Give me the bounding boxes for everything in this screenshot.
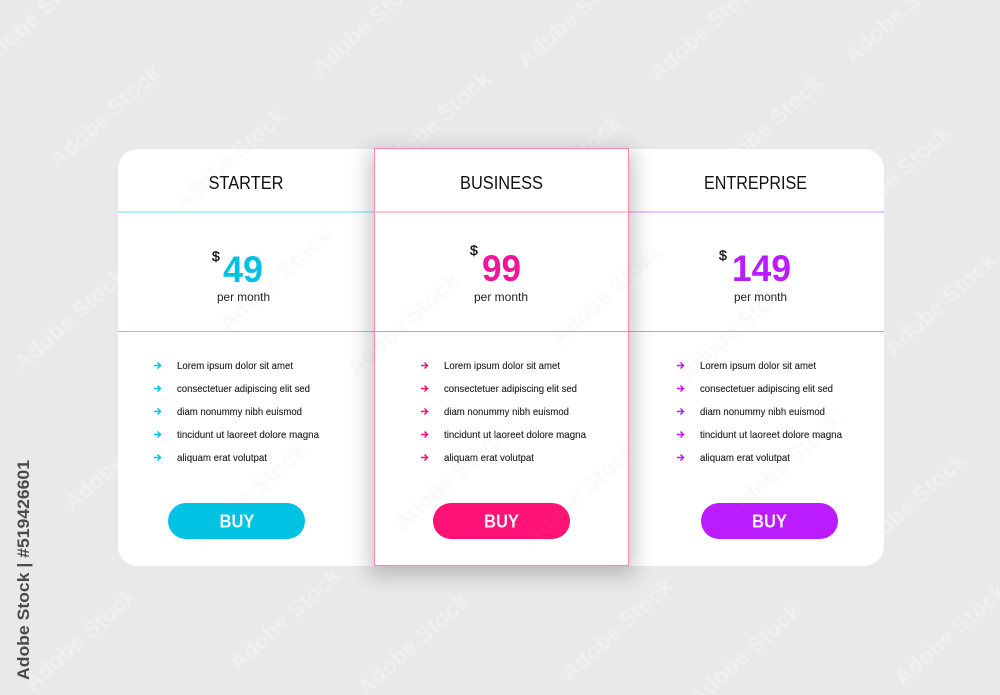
watermark pattern: Adobe Stock — [374, 65, 496, 179]
panel: business plan — [374, 148, 628, 566]
price: 49: 49 — [223, 249, 263, 290]
feature list: entreprise: diam nonummy nibh euismod — [700, 406, 825, 418]
faint watermark over card: Adobe Stock — [674, 272, 796, 386]
feature list: entreprise: tincidunt ut laoreet dolore magna — [700, 429, 842, 441]
faint watermark over card — [169, 102, 846, 551]
faint watermark over card: Adobe Stock — [189, 437, 311, 551]
watermark pattern: Adobe Stock — [19, 582, 141, 695]
feature list: starter: tincidunt ut laoreet dolore magna — [177, 429, 319, 441]
price: 149: $ — [719, 247, 727, 263]
heading: starter: STARTER — [208, 173, 284, 193]
price: 99: 99 — [482, 248, 521, 289]
faint watermark over card: Adobe Stock — [342, 267, 464, 381]
feature list: entreprise: aliquam erat volutpat — [700, 452, 790, 464]
watermark pattern: Adobe Stock — [556, 572, 678, 686]
feature list: entreprise: consectetuer adipiscing elit sed — [700, 383, 833, 395]
watermark pattern: Adobe Stock — [59, 402, 181, 516]
watermark pattern: Adobe Stock — [849, 447, 971, 561]
faint watermark over card: Adobe Stock — [389, 422, 511, 536]
watermark pattern: Adobe Stock — [504, 109, 626, 223]
feature list: entreprise — [677, 360, 842, 464]
button: buy entreprise — [701, 503, 838, 539]
watermark pattern: Adobe Stock — [9, 262, 131, 376]
feature list: business: Lorem ipsum dolor sit amet — [444, 360, 560, 372]
watermark pattern: Adobe Stock — [224, 562, 346, 676]
price: 149: 149 — [732, 248, 791, 289]
price: 49: per month — [217, 290, 270, 304]
heading: business: BUSINESS — [460, 173, 543, 193]
button: buy business — [433, 503, 570, 539]
feature list: starter: aliquam erat volutpat — [177, 452, 267, 464]
feature list: business: tincidunt ut laoreet dolore magna — [444, 429, 586, 441]
feature list: business — [421, 360, 586, 464]
feature list: starter: Lorem ipsum dolor sit amet — [177, 360, 293, 372]
feature list: business: aliquam erat volutpat — [444, 452, 534, 464]
watermark pattern: Adobe Stock — [44, 59, 166, 173]
faint watermark over card: Adobe Stock — [169, 102, 291, 216]
price: 149 — [719, 247, 791, 304]
feature list: business: consectetuer adipiscing elit sed — [444, 383, 577, 395]
price: 49: $ — [212, 248, 220, 264]
panel: enterprise plan — [629, 173, 884, 539]
feature list: starter: diam nonummy nibh euismod — [177, 406, 302, 418]
price: 99: per month — [474, 290, 528, 304]
button: buy starter: BUY — [220, 512, 254, 532]
watermark pattern: Adobe Stock — [879, 247, 1000, 361]
price: 99: $ — [470, 242, 478, 258]
heading: entreprise: ENTREPRISE — [704, 173, 807, 193]
price: 149: per month — [734, 290, 787, 304]
faint watermark over card: Adobe Stock — [214, 222, 336, 336]
feature list: entreprise: Lorem ipsum dolor sit amet — [700, 360, 816, 372]
button: buy entreprise: BUY — [752, 512, 787, 532]
button: buy business: BUY — [484, 512, 519, 532]
shadow of business panel — [368, 150, 635, 576]
watermark pattern: Adobe Stock — [169, 102, 291, 216]
feature list: business: diam nonummy nibh euismod — [444, 406, 569, 418]
side credit text: Adobe Stock | #519426601 — [14, 460, 33, 680]
faint watermark over card: Adobe Stock — [519, 437, 641, 551]
watermark pattern: Adobe Stock — [834, 119, 956, 233]
price: 99 — [470, 242, 528, 304]
button: buy starter — [168, 503, 305, 539]
panel: pricing card — [118, 149, 884, 566]
feature list: starter — [154, 360, 319, 464]
panel: starter plan — [118, 173, 374, 539]
faint watermark over card: Adobe Stock — [546, 237, 668, 351]
faint watermark over card: Adobe Stock — [724, 407, 846, 521]
watermark pattern: Adobe Stock — [706, 69, 828, 183]
price: 49 — [212, 248, 270, 304]
feature list: starter: consectetuer adipiscing elit sed — [177, 383, 310, 395]
